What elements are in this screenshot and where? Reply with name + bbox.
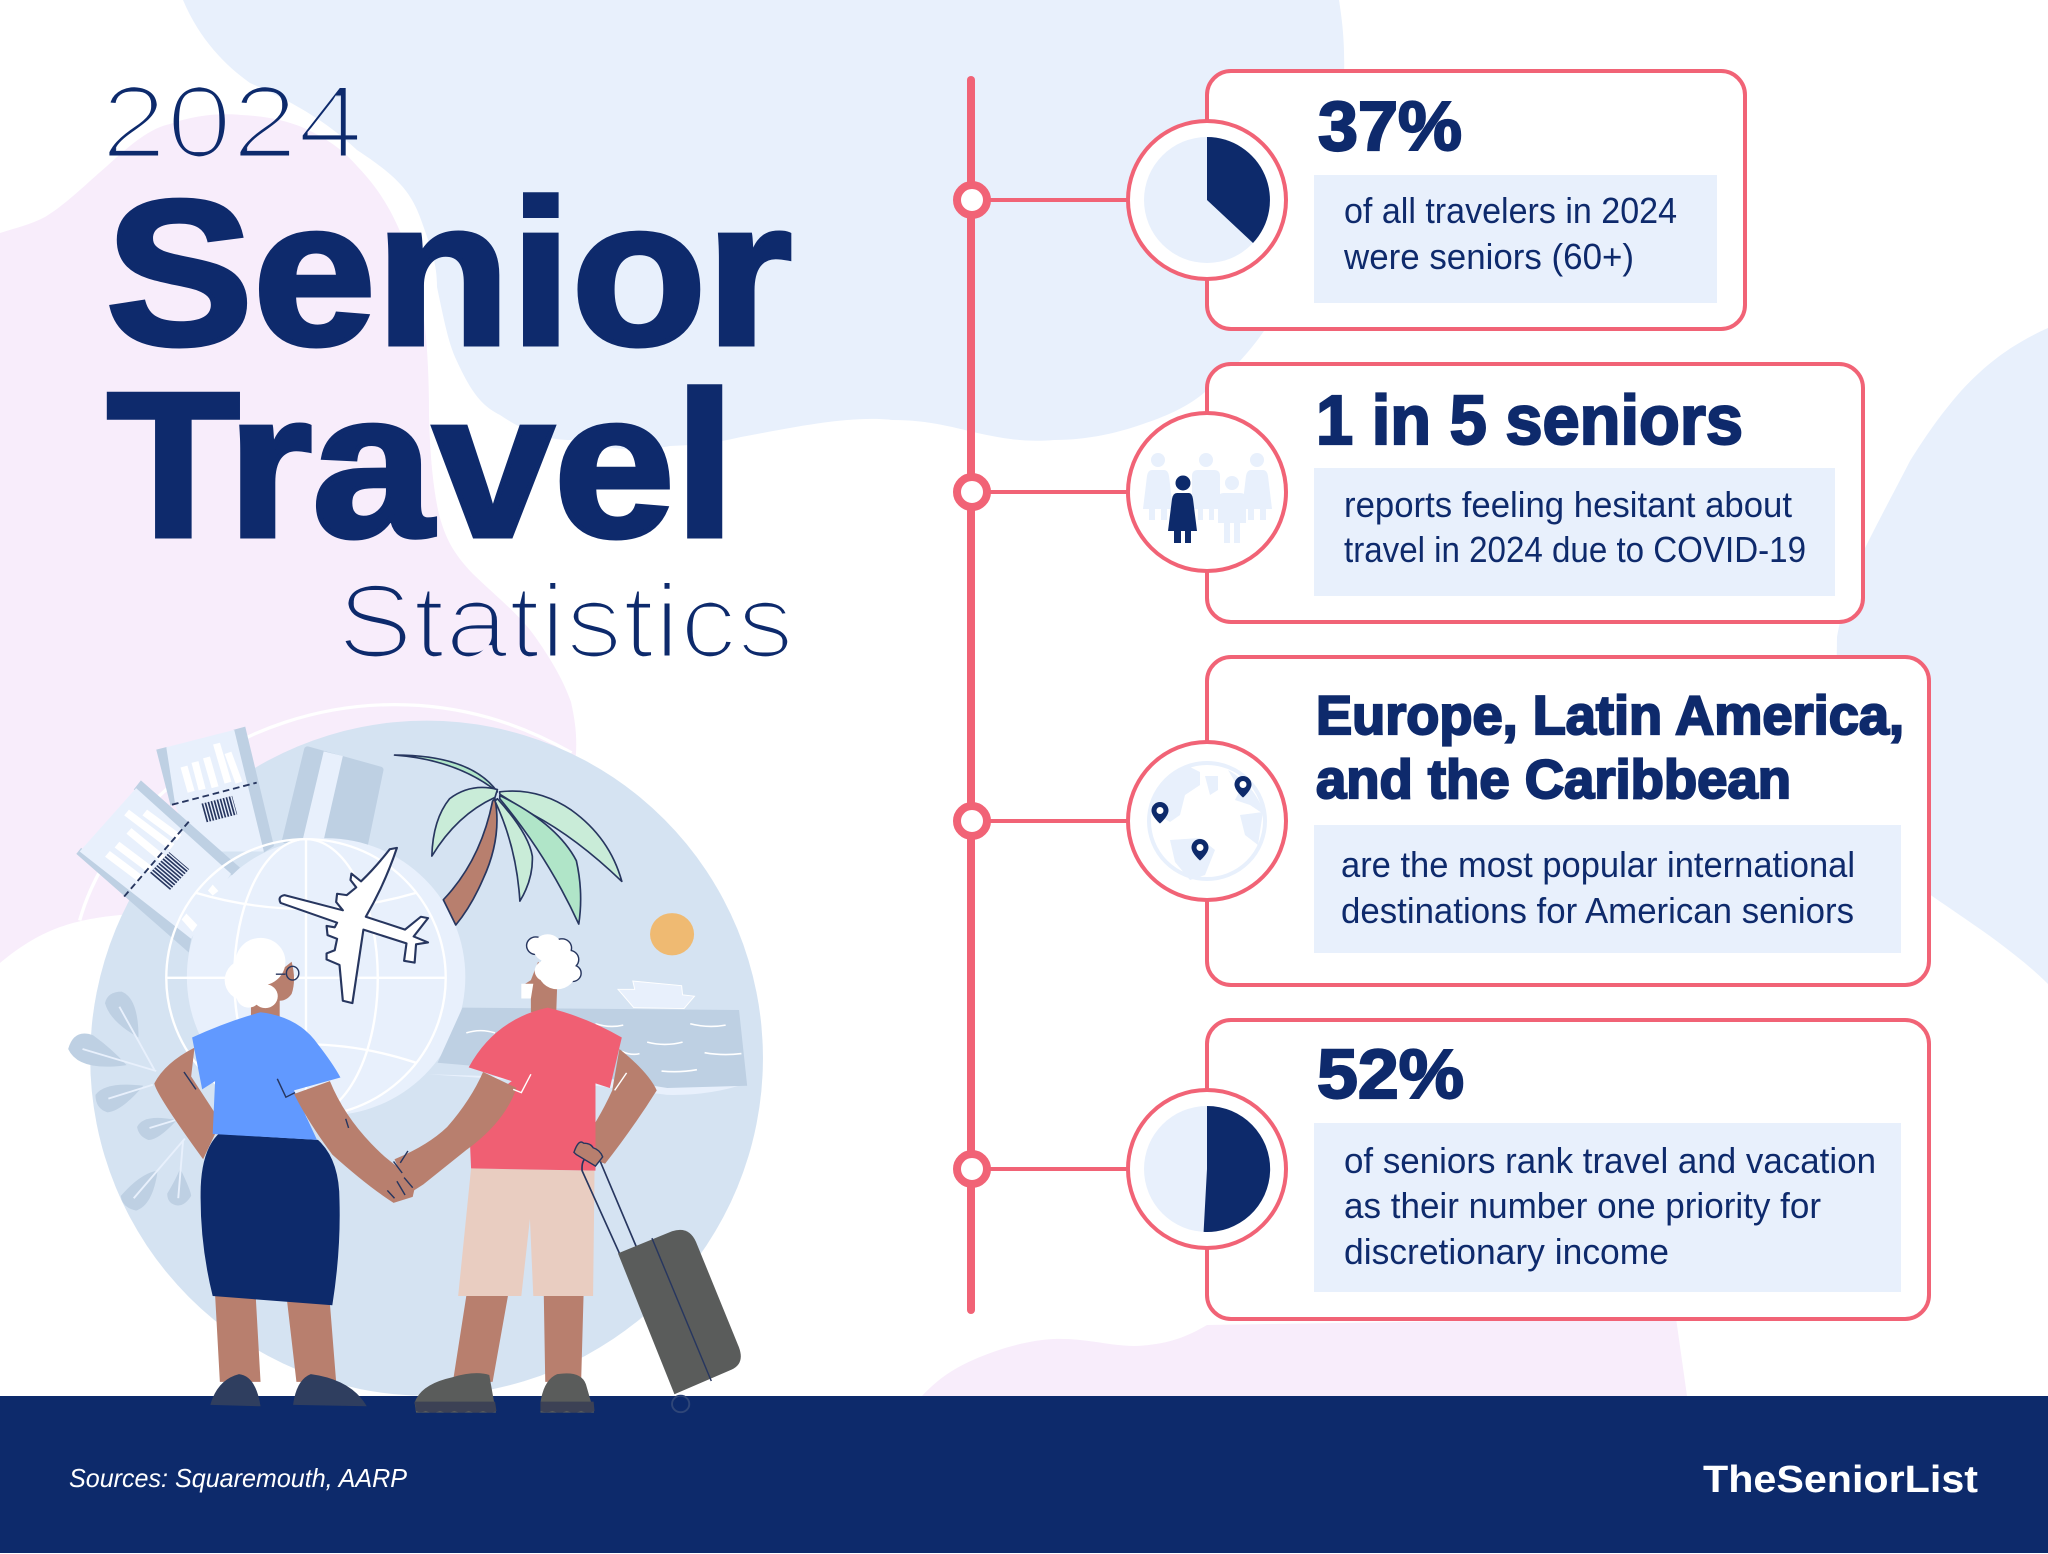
palm tree bbox=[395, 755, 622, 925]
card 2 body: travel in 2024 due to COVID-19 bbox=[1344, 529, 1806, 570]
man shirt bbox=[469, 1008, 622, 1171]
card 3 headline: and the Caribbean bbox=[1316, 748, 1791, 810]
woman glasses bbox=[276, 966, 299, 980]
node 2 bbox=[957, 477, 987, 507]
card 2 text box bbox=[1314, 468, 1835, 596]
card 4 text box bbox=[1314, 1123, 1901, 1292]
woman right arm bbox=[294, 1081, 416, 1203]
card 4 body: as their number one priority for bbox=[1344, 1185, 1821, 1226]
title bbox=[101, 65, 794, 680]
suitcase wheel bbox=[672, 1396, 689, 1412]
node 4 bbox=[957, 1154, 987, 1184]
man neck and face bbox=[524, 962, 557, 1012]
woman figure bbox=[154, 938, 416, 1406]
sources note: Sources: Squaremouth, AARP bbox=[69, 1463, 408, 1493]
background: pink blob left bbox=[0, 114, 576, 963]
card 4 panel bbox=[1207, 1020, 1929, 1319]
card 2 panel bbox=[1207, 364, 1863, 622]
connector 1 bbox=[972, 198, 1128, 202]
credit card bbox=[285, 750, 380, 843]
clasped hands finger lines bbox=[387, 1151, 413, 1198]
cruise ship bbox=[618, 981, 695, 1009]
man left arm bbox=[395, 1072, 517, 1194]
man beard bbox=[521, 984, 533, 998]
thin white arc bbox=[80, 705, 572, 920]
icon: pie 37 percent bbox=[1128, 121, 1286, 279]
icon: pie 52 percent bbox=[1128, 1090, 1286, 1248]
background: blue blob top bbox=[183, 0, 1344, 449]
card 2 body: reports feeling hesitant about bbox=[1344, 484, 1792, 525]
connector 4 bbox=[972, 1167, 1128, 1171]
brand logo: TheSeniorList bbox=[1703, 1459, 1978, 1501]
man shoe soles bbox=[415, 1402, 595, 1413]
icon: group of people bbox=[1128, 413, 1286, 571]
connector 2 bbox=[972, 490, 1128, 494]
footer bar bbox=[0, 1396, 2048, 1553]
timeline line bbox=[967, 80, 975, 1310]
woman head and neck bbox=[251, 962, 294, 1017]
man legs bbox=[453, 1296, 584, 1382]
card 4 body: of seniors rank travel and vacation bbox=[1344, 1140, 1876, 1181]
node 3 bbox=[957, 806, 987, 836]
card 4 headline: 52% bbox=[1317, 1035, 1464, 1113]
woman shirt bbox=[192, 1012, 340, 1140]
card 3 text box bbox=[1314, 825, 1901, 953]
woman left arm bbox=[154, 1048, 215, 1159]
card 3 panel bbox=[1207, 657, 1929, 985]
airplane bbox=[280, 848, 428, 1003]
sea bbox=[428, 1008, 747, 1095]
man hand on handle bbox=[574, 1142, 603, 1166]
card 1 headline: 37% bbox=[1318, 87, 1462, 165]
connector 3 bbox=[972, 819, 1128, 823]
stat card 2 bbox=[957, 364, 1863, 622]
card 1 panel bbox=[1207, 71, 1745, 329]
suitcase bbox=[574, 1142, 741, 1412]
card 1 body: of all travelers in 2024 bbox=[1344, 190, 1677, 231]
stat card 4 bbox=[957, 1020, 1929, 1319]
card 1 text box bbox=[1314, 175, 1717, 303]
suitcase body bbox=[618, 1230, 741, 1394]
title: Statistics: Statistics bbox=[337, 564, 794, 680]
boarding pass lower bbox=[76, 780, 240, 953]
title: Travel: Travel bbox=[107, 350, 735, 580]
card 3 body: are the most popular international bbox=[1341, 844, 1855, 885]
title: Senior: Senior bbox=[106, 158, 792, 388]
woman hair bbox=[225, 938, 285, 1008]
card 3 headline: Europe, Latin America, bbox=[1316, 684, 1904, 746]
man right arm bbox=[574, 1049, 657, 1164]
man shoes bbox=[415, 1373, 594, 1413]
globe wireframe bbox=[166, 839, 446, 1116]
card 2 headline: 1 in 5 seniors bbox=[1316, 381, 1743, 459]
background: pink blob bottom bbox=[922, 1318, 1687, 1396]
suitcase handle bbox=[582, 1157, 636, 1253]
globe light disc bbox=[187, 838, 465, 1116]
big circle backdrop bbox=[90, 721, 763, 1396]
icon: globe with pins bbox=[1128, 742, 1286, 900]
card 3 body: destinations for American seniors bbox=[1341, 890, 1854, 931]
boarding pass upper bbox=[156, 727, 274, 852]
node 1 bbox=[957, 185, 987, 215]
man hair bbox=[527, 937, 581, 981]
woman skirt bbox=[201, 1134, 340, 1305]
card 4 body: discretionary income bbox=[1344, 1231, 1669, 1272]
man figure bbox=[387, 934, 657, 1413]
woman shoes bbox=[210, 1374, 367, 1406]
stat card 1 bbox=[957, 71, 1745, 329]
plant leaves bbox=[68, 992, 191, 1211]
title: year: 2024 bbox=[101, 65, 363, 179]
sun bbox=[650, 913, 694, 955]
woman legs bbox=[215, 1295, 336, 1382]
background: blue blob right bbox=[1835, 328, 2048, 984]
card 1 body: were seniors (60+) bbox=[1343, 236, 1634, 277]
stat card 3 bbox=[957, 657, 1929, 985]
illustration: senior couple with travel scene bbox=[68, 705, 763, 1413]
man shorts bbox=[458, 1168, 595, 1296]
